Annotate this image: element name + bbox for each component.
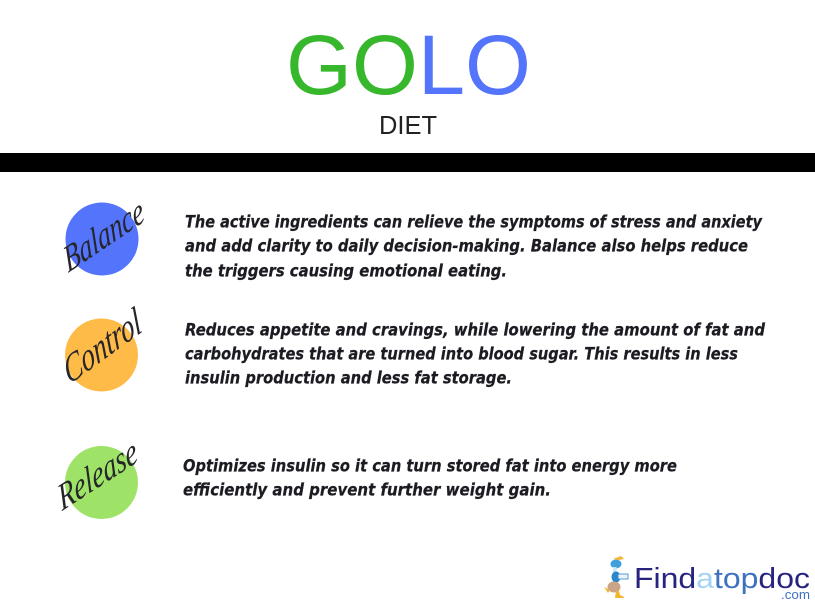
panel: balance xyxy=(59,189,763,281)
panel: control xyxy=(59,299,765,394)
panel: release xyxy=(53,429,677,519)
subtitle: DIET xyxy=(379,110,437,140)
release description: Optimizes insulin so it can turn stored fat into energy more xyxy=(183,456,677,476)
release description xyxy=(183,456,677,500)
icon: balance circle xyxy=(66,202,138,276)
logo: Findatopdoc xyxy=(604,556,810,602)
balance description xyxy=(185,212,763,280)
logo wordmark: Findatopdoc xyxy=(634,563,810,595)
control description: Reduces appetite and cravings, while lowering the amount of fat and xyxy=(185,320,765,340)
title: GOLO xyxy=(286,18,531,112)
logo domain: .com xyxy=(781,587,810,602)
control description: carbohydrates that are turned into blood sugar. This results in less xyxy=(185,344,738,364)
balance script label: Balance xyxy=(59,189,148,281)
control description xyxy=(185,320,765,388)
black divider bar xyxy=(0,153,815,172)
control script label: Control xyxy=(59,299,146,394)
control description: insulin production and less fat storage. xyxy=(185,368,512,388)
release script label: Release xyxy=(53,429,141,519)
balance description: the triggers causing emotional eating. xyxy=(185,262,507,280)
icon: release circle xyxy=(65,446,138,519)
balance description: and add clarity to daily decision-making. Balance also helps reduce xyxy=(185,236,748,256)
release description: efficiently and prevent further weight gain. xyxy=(183,480,551,500)
icon: duck mascot xyxy=(604,556,628,598)
icon: control circle xyxy=(65,318,138,392)
